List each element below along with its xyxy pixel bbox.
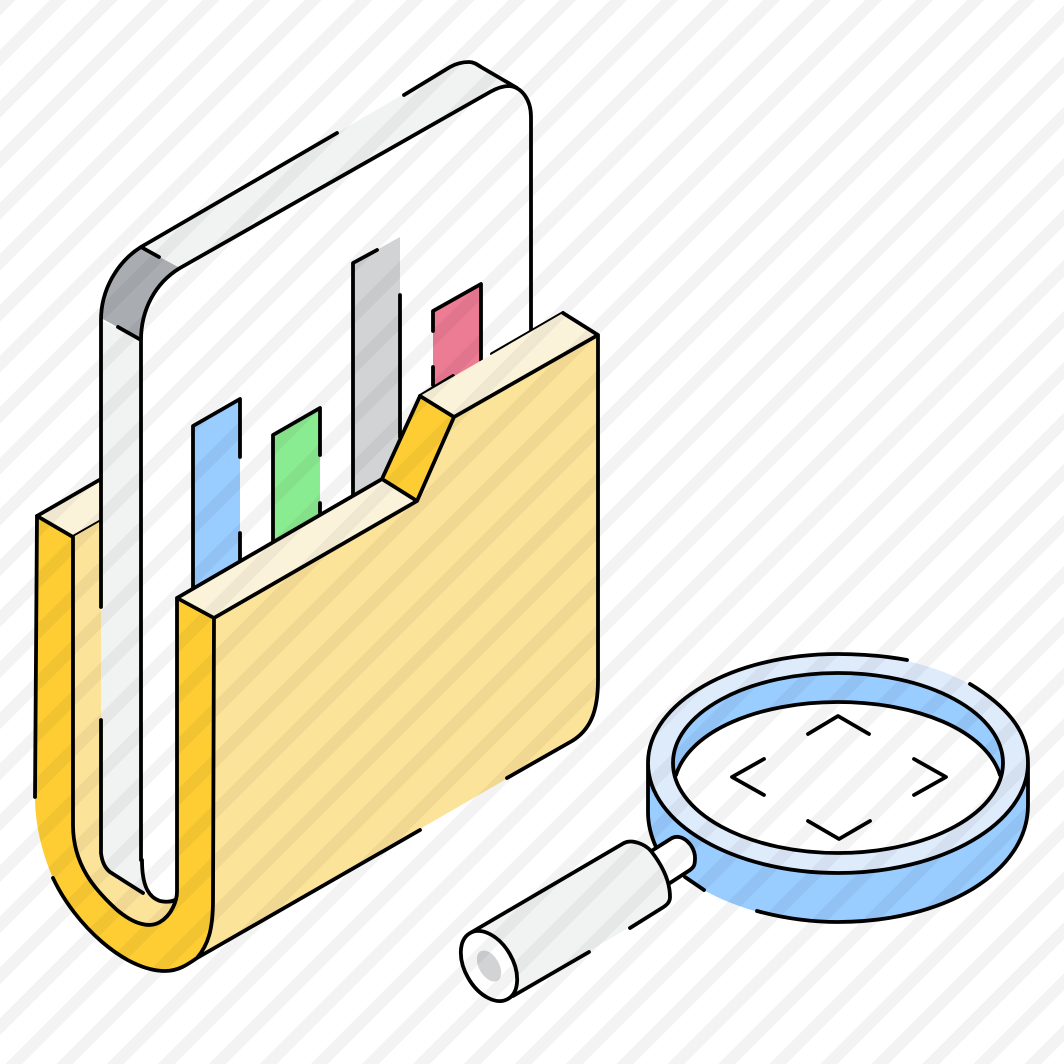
handle end cap centre [472,946,506,986]
magnifier body side [648,763,1028,922]
folder outlines [35,313,598,971]
handle end cap [449,921,529,1011]
magnifier lens [676,702,1000,853]
folder back top edge [37,479,141,537]
magnifier outlines [648,654,1028,922]
sheet face [141,86,531,901]
document sheet [101,62,531,902]
bar chart [193,237,481,592]
folder front [35,313,598,971]
bar: grey [353,237,400,497]
bar: pink [433,284,481,390]
sheet outlines [101,62,531,902]
folder back rim tick marks [420,313,563,396]
magnifier rim [648,654,1028,874]
magnifier handle [449,842,670,1011]
sheet top edge [141,62,517,268]
sheet corner [101,247,180,340]
folder top rim left [177,479,417,618]
magnifying glass [449,654,1028,1011]
magnifier inner wall [673,673,1003,853]
folder top rim right [420,313,598,417]
folder inner back wall [73,521,175,924]
folder yellow U edge [35,516,214,971]
bar: green [273,408,320,545]
magnifier neck [653,836,695,883]
folder back [37,479,175,924]
folder tab side [382,396,454,501]
folder front face [197,335,598,958]
magnifier target marks [732,716,946,839]
bar: blue [193,399,240,592]
sheet left edge [101,320,147,894]
